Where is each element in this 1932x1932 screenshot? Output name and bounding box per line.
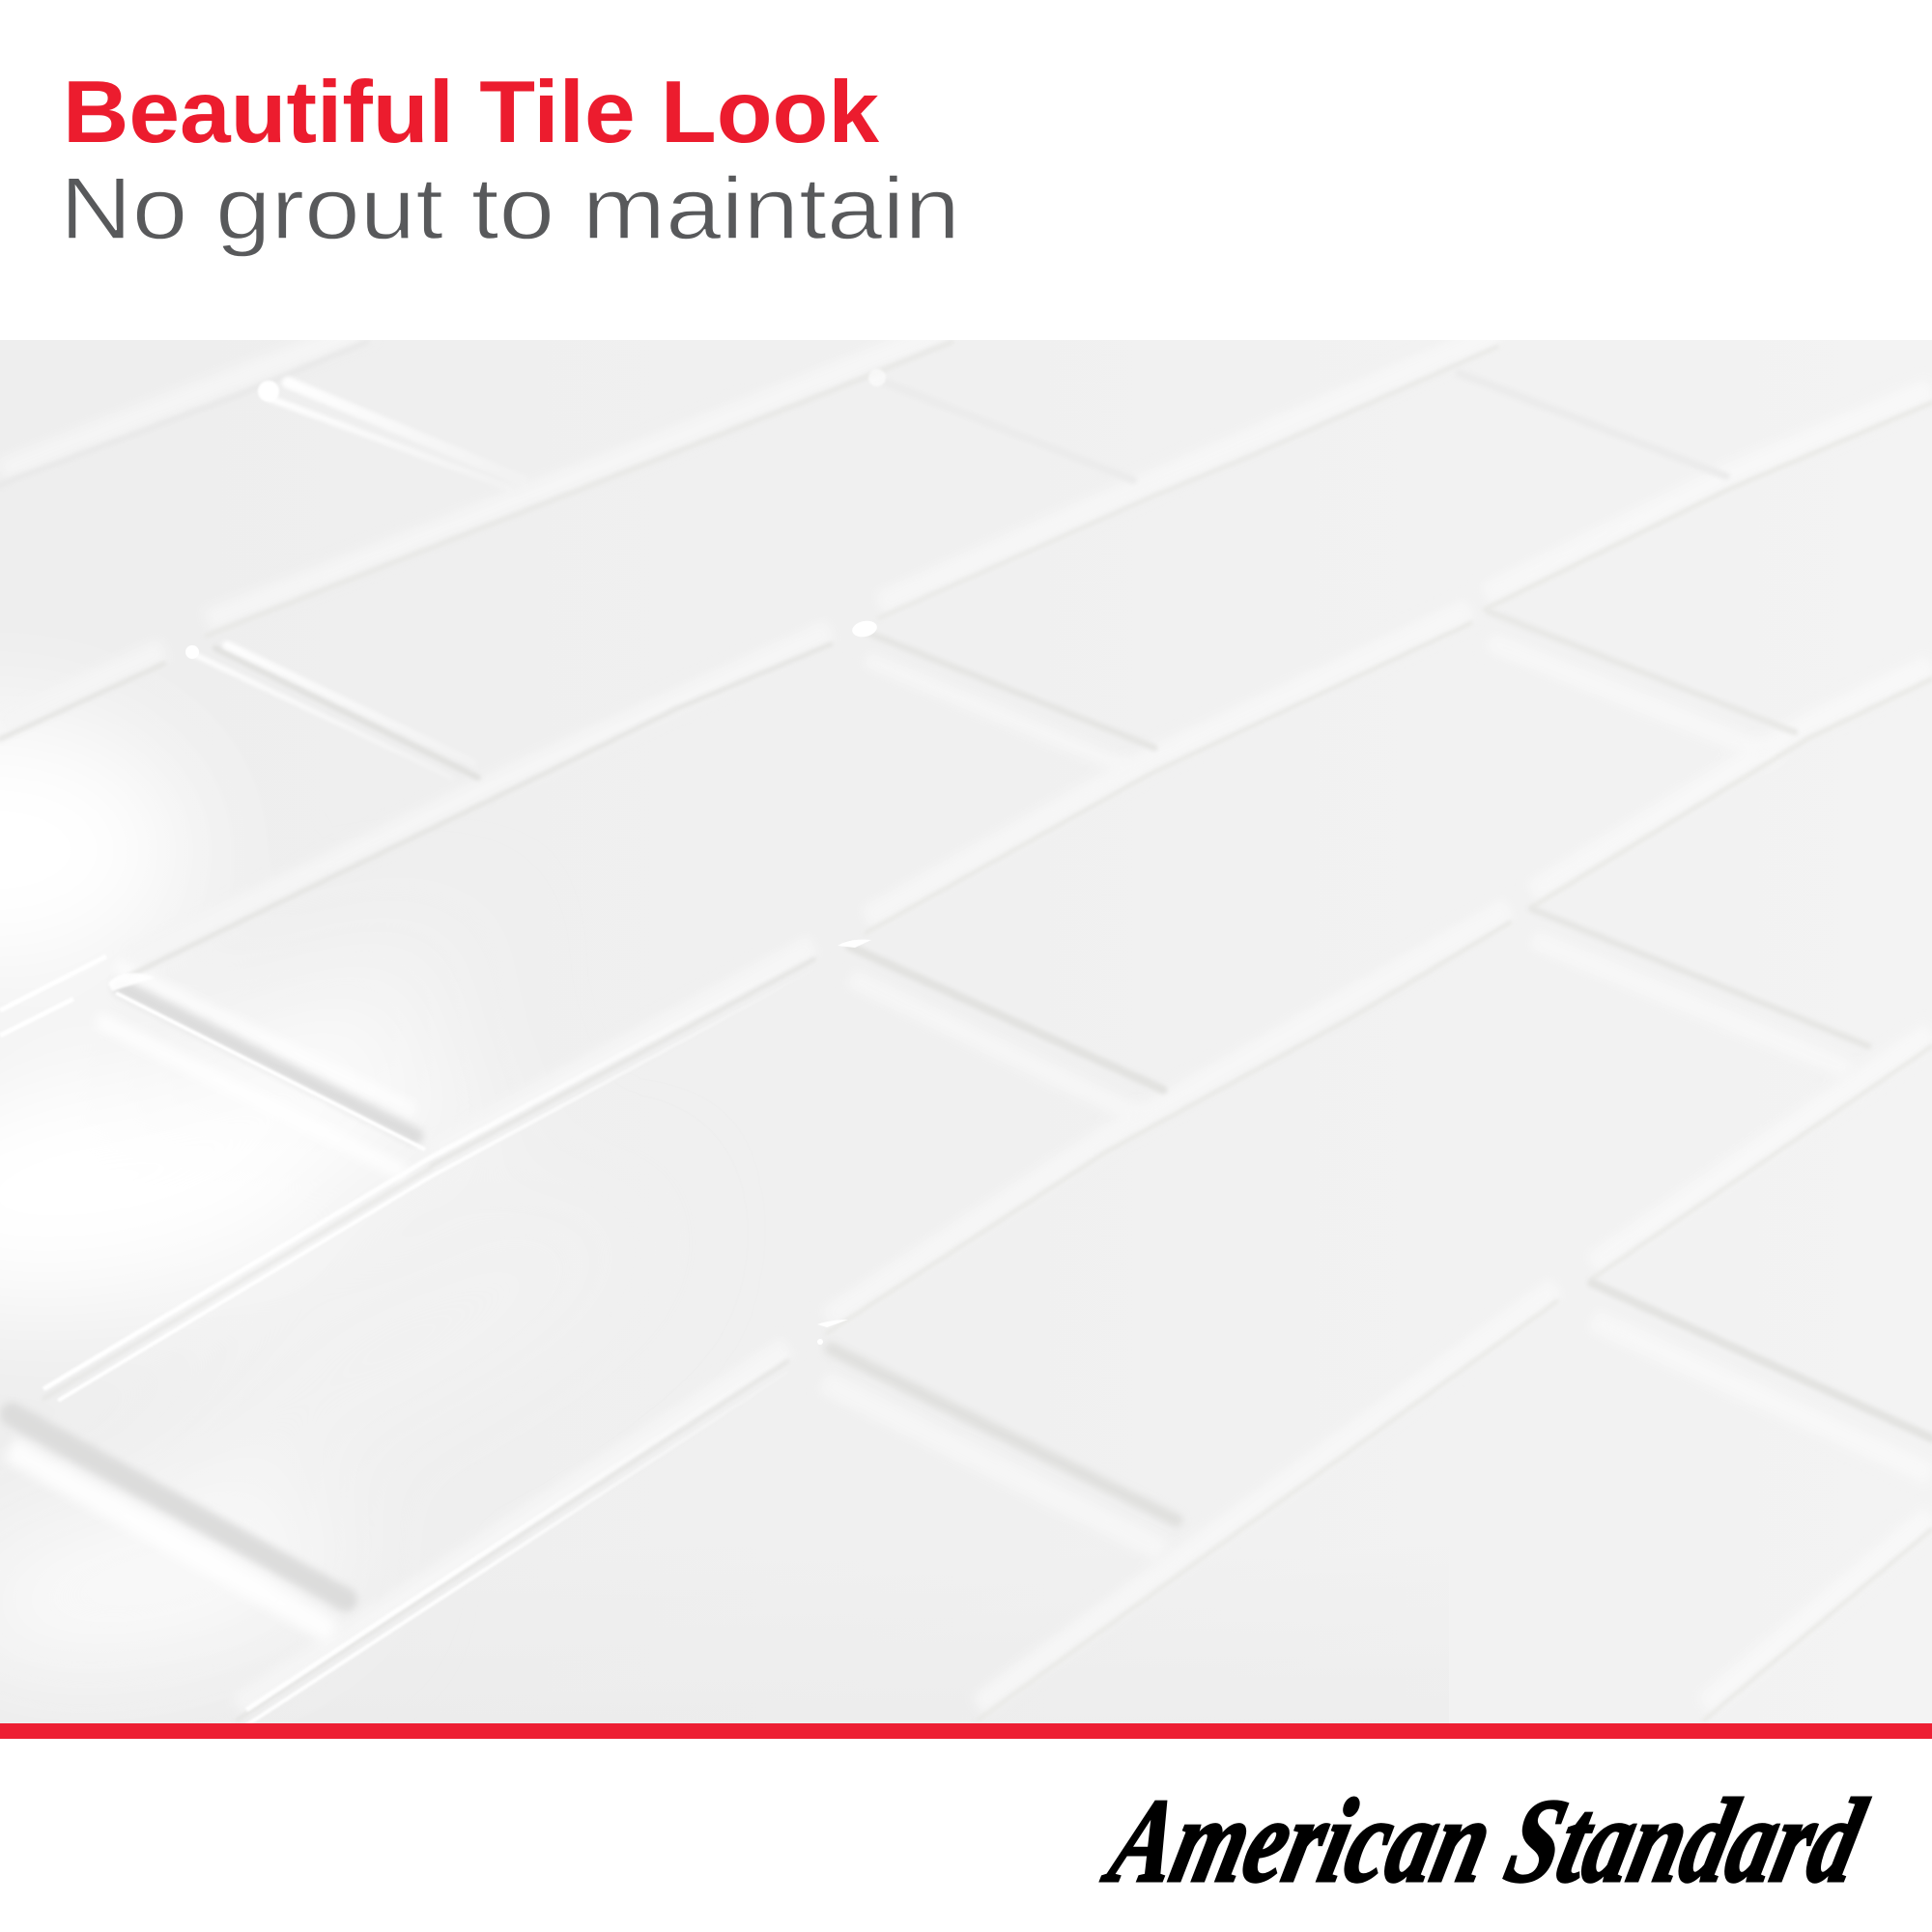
dark grout lines along short seams (215, 373, 1932, 1438)
soft light glows on tiles (0, 726, 400, 1658)
light bevel bands above long seams (343, 830, 1175, 1706)
red divider band (0, 1723, 1932, 1739)
panel: white subway tile photo (0, 327, 1932, 1725)
light bevel bands below short seams (823, 641, 1932, 1551)
bright soft edge lines on the near seams (0, 985, 612, 1723)
glossy white highlights at seam corners (108, 369, 886, 1345)
title: Beautiful Tile Look: Beautiful Tile Look (63, 64, 879, 161)
dark grout lines along long seams (0, 342, 1932, 1720)
bevelled deep shadows on near short seams (12, 987, 1177, 1600)
subtitle: No grout to maintain: No grout to maintain (60, 160, 960, 258)
